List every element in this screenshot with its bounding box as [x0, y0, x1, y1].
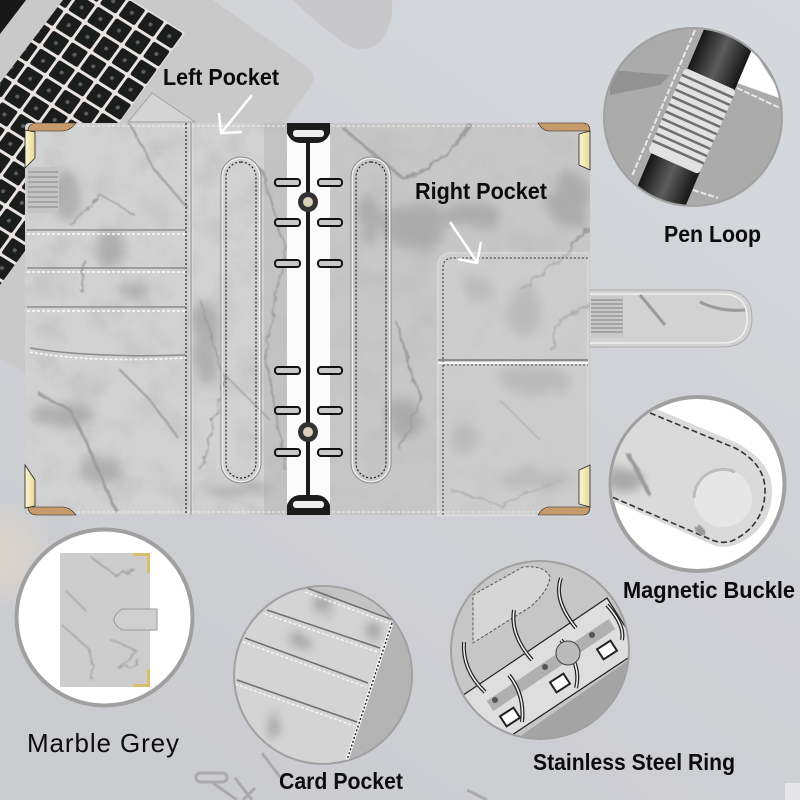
bright corner patch: [785, 783, 800, 800]
arrow: left pocket: [219, 95, 252, 133]
ring metal bar: [275, 123, 342, 515]
label: Magnetic Buckle: Magnetic Buckle: [623, 577, 795, 603]
label: Card Pocket: Card Pocket: [279, 768, 403, 794]
ring bases: [500, 641, 617, 726]
paper clips: [196, 753, 487, 800]
rings: [275, 179, 342, 456]
right pocket: [438, 253, 588, 515]
steel bar: [464, 597, 628, 734]
lower pocket line: [438, 359, 588, 361]
stitched strip: [473, 567, 550, 643]
left card pockets: [27, 230, 186, 360]
darker right panel: [330, 123, 590, 515]
closed binder: [60, 553, 150, 687]
right slot strip: [351, 157, 391, 483]
strap close-up: [612, 408, 772, 547]
arrow: right pocket: [450, 222, 481, 263]
label: Right Pocket: Right Pocket: [415, 178, 547, 204]
rings: [464, 578, 622, 722]
detail circle: pen loop: [603, 27, 783, 207]
gold corners: [133, 553, 150, 573]
label: Pen Loop: Pen Loop: [664, 221, 761, 247]
elastic band: [591, 296, 623, 338]
elastic loop: [648, 68, 736, 174]
detail circle: stainless steel ring: [450, 560, 640, 745]
marble veins: [40, 123, 590, 510]
pocket stitch lines: [237, 588, 393, 722]
binder: open book: [25, 123, 752, 515]
trackpad: [128, 93, 195, 122]
label: Left Pocket: Left Pocket: [163, 64, 279, 90]
screw: [556, 641, 580, 665]
marble blotches: [26, 171, 592, 498]
laptop: [0, 0, 314, 373]
strap with magnetic closure: [585, 290, 752, 347]
mouse: [293, 0, 392, 49]
rivets: [492, 632, 595, 703]
shadow patch on desk: [0, 513, 40, 597]
closure tab: [114, 609, 157, 630]
pen: [638, 30, 752, 205]
marble cover: [25, 123, 590, 515]
pen loop on cover: [27, 167, 59, 213]
detail circle: magnetic buckle: [600, 395, 786, 573]
metal corners: [25, 123, 590, 515]
white gap: [738, 49, 779, 98]
label: Stainless Steel Ring: Stainless Steel Ring: [533, 749, 735, 775]
detail circle: card pocket: [233, 585, 413, 765]
screen edge: [0, 0, 26, 34]
screws: [298, 192, 318, 212]
shadowed marble below bar: [521, 661, 627, 738]
label: Marble Grey: Marble Grey: [27, 728, 179, 758]
keyboard: [0, 0, 185, 285]
left slot strip: [221, 157, 261, 483]
detail circle: marble grey product: [14, 528, 194, 708]
laptop body: [0, 0, 314, 373]
